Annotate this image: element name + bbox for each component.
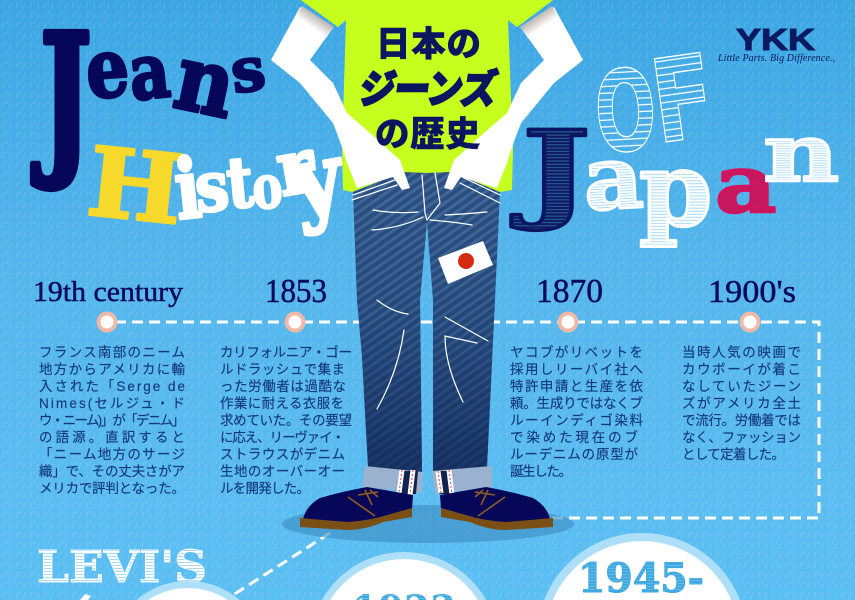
title: History <box>83 120 353 247</box>
title: Japan: a <box>581 125 646 231</box>
circle: LEVI'S era <box>136 581 240 600</box>
text block: 1870: ルーインディゴ染料 <box>510 412 644 428</box>
heading: 1900's: 1900's <box>708 273 796 309</box>
text block: 1853: 作業に耐える衣服を <box>220 396 344 411</box>
logo: YKK: YKK <box>736 22 816 57</box>
text block: 19th century: の語源。直訳すると <box>39 430 185 445</box>
text block: 1853: った労働者は過酷な <box>220 379 346 394</box>
text block: 19th century: 入された「Serge de <box>39 379 185 394</box>
title: Japan: p <box>639 130 712 250</box>
figure: jeans <box>352 172 500 472</box>
sleeve shadows <box>295 6 559 38</box>
text block: 1870: ヤコブがリベットを <box>510 344 643 360</box>
title: History: t <box>223 141 257 225</box>
text block: 1900's: なく、ファッション <box>682 430 801 445</box>
title: Japan: J <box>511 107 591 234</box>
title: History: s <box>191 145 232 229</box>
text block: 19th century: 地方からアメリカに輸 <box>39 362 186 377</box>
text block: 1853: に応え、リーヴァイ・ <box>220 429 345 445</box>
text block: 19th century: 「ニーム地方のサージ <box>39 447 185 462</box>
icon: japanese flag patch <box>438 241 493 284</box>
heading: 1853: 1853 <box>265 273 327 310</box>
figure: left arm <box>271 7 410 190</box>
title: Jeans: n <box>167 23 245 139</box>
text block: 19th century: フランス南部のニーム <box>39 345 185 360</box>
heading: 19th century: 19th century <box>33 276 184 308</box>
figure: right arm <box>444 7 583 190</box>
title: History: y <box>281 120 353 239</box>
text block: 1853: カリフォルニア・ゴー <box>220 344 352 360</box>
title: Jeans <box>31 0 270 194</box>
text block: 1853: 求めていた。その要望 <box>220 413 352 428</box>
heading: 1870: 1870 <box>536 273 603 310</box>
text block: 1870: 頼。生成りではなくブ <box>510 395 644 411</box>
text block: 1870: 誕生した。 <box>510 464 572 479</box>
stitching <box>352 173 500 409</box>
text block: 19th century: Nimes(セルジュ・ド <box>39 396 185 411</box>
title: Of: O <box>592 47 660 179</box>
title: Jeans: J <box>31 0 92 194</box>
text block: 1900's: なしていたジーン <box>682 379 801 394</box>
text block: 1870: で染めた現在のブ <box>510 429 638 445</box>
figure: left shoe <box>300 487 413 530</box>
figure: cuffs <box>362 466 492 495</box>
circle: 1923 <box>322 552 486 600</box>
shirt title: ジーンズ <box>357 68 500 112</box>
heading: LEVI'S: LEVI'S <box>37 542 207 593</box>
text block: 1853: ルを開発した。 <box>220 481 310 496</box>
text block: 1853: ルドラッシュで集ま <box>220 362 345 377</box>
title: Japan: a <box>715 137 777 231</box>
text block: 19th century <box>39 345 186 496</box>
text block: 1870: 採用しリーバイ社へ <box>510 362 643 377</box>
text block: 19th century: 織」で、その丈夫さがア <box>39 464 185 479</box>
timeline markers <box>96 312 760 332</box>
text block: 1900's: カウボーイが着こ <box>682 361 801 377</box>
shirt title: の歴史 <box>375 116 480 154</box>
text block: 1900's <box>682 345 801 462</box>
text block: 1900's: 当時人気の映画で <box>682 345 801 360</box>
title: Of: F <box>643 30 723 171</box>
shirt title <box>357 26 500 154</box>
title: Japan: n <box>763 106 839 201</box>
title: Jeans: s <box>226 34 270 108</box>
shirt title: 日本の <box>376 26 481 64</box>
text block: 1870: ルーデニムの原型が <box>510 446 638 462</box>
title: History: i <box>170 140 205 239</box>
title: History: o <box>249 150 285 224</box>
text block: 1853: ストラウスがデニム <box>220 446 345 462</box>
title: Jeans: a <box>125 26 174 119</box>
figure: t-shirt <box>301 0 553 192</box>
circle: 1945- <box>544 533 740 600</box>
figure shadow <box>282 505 574 543</box>
text block: 19th century: ウ・ニーム)」が「デニム」 <box>39 412 185 428</box>
title: History: H <box>83 126 188 247</box>
text block: 1853: 生地のオーバーオー <box>220 464 345 479</box>
figure: sleeves <box>301 0 553 27</box>
logo: YKK <box>717 22 835 64</box>
text block: 1870 <box>510 344 644 479</box>
mark under LEVI'S <box>80 594 91 600</box>
title: Jeans: e <box>83 19 132 118</box>
text block: 1900's: として定着した。 <box>682 446 785 462</box>
text block: 1853 <box>220 344 352 496</box>
figure: right shoe <box>440 487 553 530</box>
title: History: r <box>270 121 322 214</box>
title: Japan <box>511 106 839 250</box>
text block: 1900's: で流行。労働着では <box>682 412 801 428</box>
text block: 1870: 特許申請と生産を依 <box>510 379 644 394</box>
logo: YKK: Little Parts. Big Difference., <box>717 53 835 64</box>
title: Of <box>592 30 723 179</box>
text block: 19th century: メリカで評判となった。 <box>39 481 185 496</box>
text block: 1900's: ズがアメリカ全土 <box>682 396 801 411</box>
timeline dashed line <box>115 322 819 595</box>
